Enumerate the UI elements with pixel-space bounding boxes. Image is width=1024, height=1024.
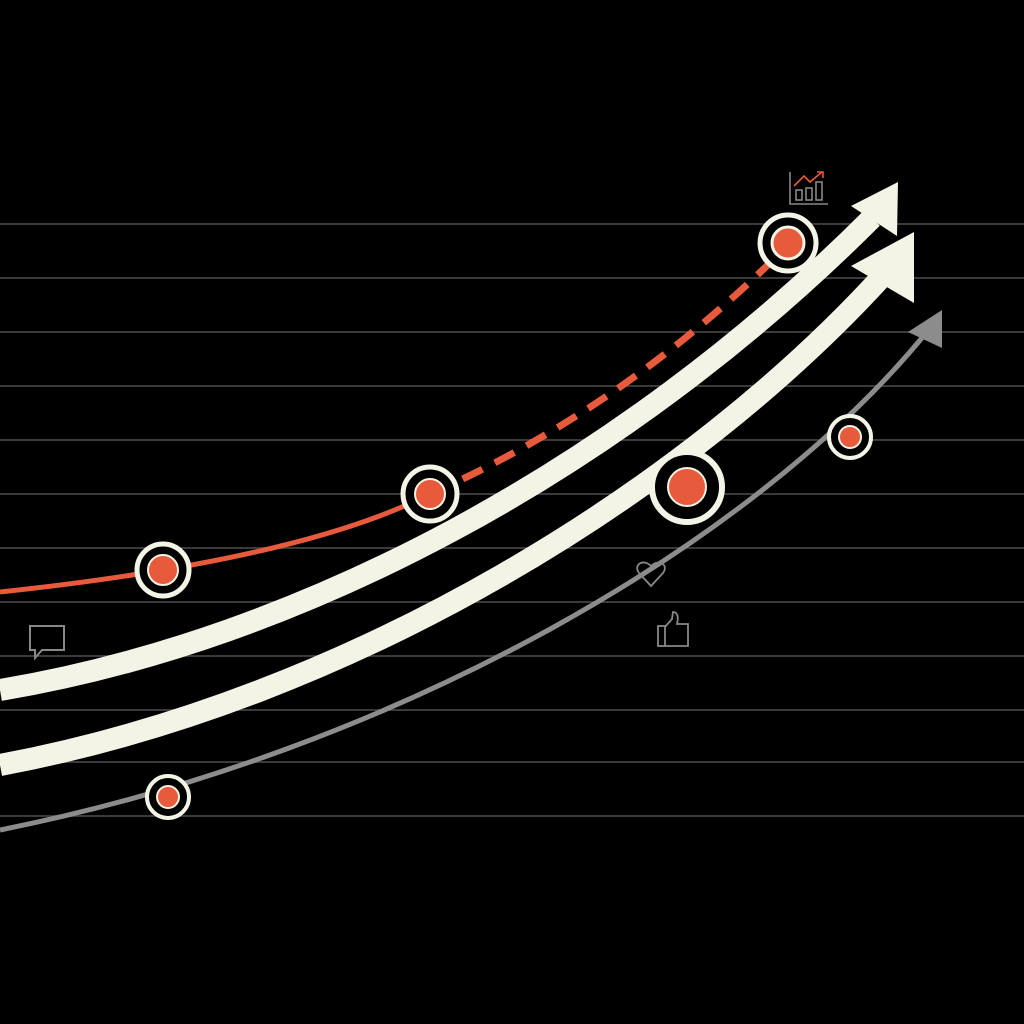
marker 1 [137, 544, 189, 596]
gray arrow [0, 310, 942, 830]
icon: heart [637, 562, 665, 586]
white arrow 2 [0, 232, 914, 765]
marker 5 [829, 416, 871, 458]
marker 2 [403, 467, 457, 521]
icon: speech bubble [30, 626, 64, 658]
marker 3 [760, 215, 816, 271]
icon: thumbs up [658, 612, 688, 646]
white arrow 1 [0, 182, 898, 690]
red trend line [0, 258, 775, 592]
marker 6 [147, 776, 189, 818]
marker 4 [652, 452, 722, 522]
icon: chart [790, 172, 828, 204]
